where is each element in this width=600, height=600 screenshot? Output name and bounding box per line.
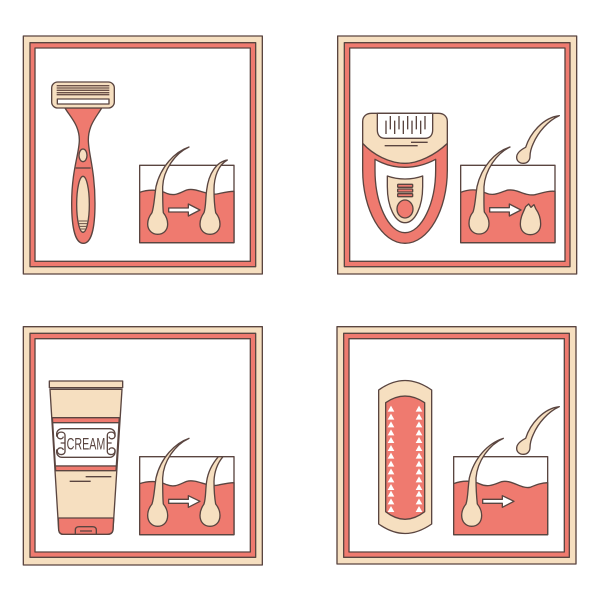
label: CREAM: CREAM — [67, 434, 105, 453]
chart: skin with shaved hair — [140, 147, 234, 243]
panel: epilator — [338, 36, 577, 274]
icon: epilator — [363, 113, 447, 243]
chart: skin with hair removed by cream — [140, 438, 234, 535]
panel frame — [23, 36, 262, 274]
icon: razor — [52, 82, 114, 243]
chart: skin with epilated hair — [461, 116, 559, 243]
panel: razor shaving — [23, 36, 262, 274]
icon: wax strip — [379, 380, 432, 533]
panel: depilatory cream — [23, 327, 262, 565]
panel frame — [23, 327, 262, 565]
panel frame — [338, 36, 577, 274]
icon: cream tube — [49, 381, 123, 534]
chart: skin with waxed hair removed — [454, 407, 559, 535]
panel frame — [337, 327, 576, 564]
label: CREAM — [57, 429, 115, 457]
panel: wax strip — [337, 327, 576, 564]
